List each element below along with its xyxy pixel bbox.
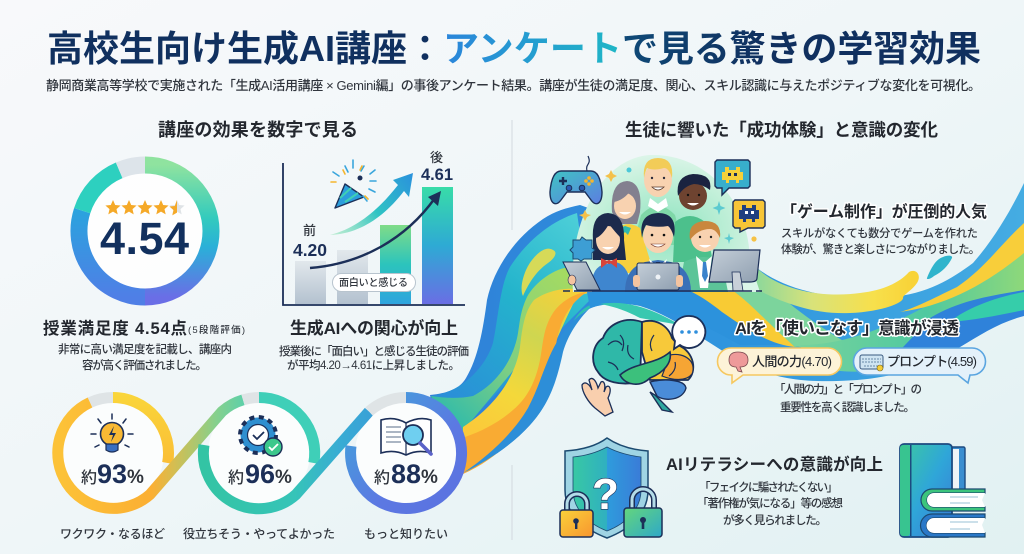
icon: books: [900, 444, 985, 537]
star rating: [105, 200, 185, 215]
ring 3 value: 88: [391, 459, 421, 489]
pill: human ability: [718, 348, 842, 383]
mint backdrop: [572, 155, 760, 292]
ring interiors: [62, 402, 457, 504]
panel: satisfaction donut: [79, 165, 211, 297]
satisfaction caption: 授業満足度 4.54点: [43, 318, 187, 338]
icon: yellow pixel bubble: [733, 200, 765, 232]
text: mastery body: 重要性を高く認識しました。: [780, 400, 915, 414]
tablet: [563, 262, 600, 290]
subtitle: 静岡商業高等学校で実施された「生成AI活用講座 × Gemini編」の事後アンケート結果。講座が生徒の満足度、関心、スキル認識に与えたポジティブな変化を可視化。: [46, 78, 981, 93]
icon: speech bubble on brain: [672, 316, 705, 349]
bar chart caption: 生成AIへの関心が向上: [290, 318, 458, 338]
ring 1 value: [81, 459, 144, 489]
up arrow: navy: [310, 191, 441, 268]
panel: bar chart: [283, 150, 465, 305]
axes: [283, 163, 465, 305]
yellow swoosh: [745, 268, 919, 313]
section heading: left: 講座の効果を数字で見る: [158, 120, 358, 140]
before label: 4.20: [293, 240, 327, 260]
satisfaction caption: 容が高く評価されました。: [82, 358, 207, 372]
pill: prompt: [854, 348, 986, 383]
divider: bottom: [511, 465, 513, 540]
text: mastery body: [774, 383, 922, 414]
back row boy: [633, 158, 683, 245]
shield: [565, 438, 648, 538]
satisfaction caption: [43, 318, 245, 372]
bar chart caption: [279, 318, 469, 372]
text: game creation: 体験が、驚きと楽しさにつながりました。: [781, 242, 980, 256]
text: AI literacy: が多く見られました。: [723, 513, 827, 527]
text: AI literacy: [666, 454, 883, 527]
title: [47, 28, 981, 69]
score: 4.54: [100, 213, 189, 264]
satisfaction caption: (5段階評価): [188, 324, 245, 336]
front centre boy: [625, 213, 691, 292]
ring strokes: [58, 397, 462, 509]
divider: top: [511, 120, 513, 230]
table line: [563, 290, 762, 292]
back row girl: [612, 181, 654, 273]
pill: human ability: 人間の力(4.70): [752, 354, 832, 369]
ring labels: [60, 526, 448, 541]
pill label: 面白いと感じる: [339, 276, 408, 289]
text: game creation: 「ゲーム制作」が圧倒的人気: [781, 202, 987, 221]
up arrow: teal: [330, 173, 413, 235]
pill: prompt: プロンプト(4.59): [887, 354, 977, 369]
ring 2 value: %: [275, 467, 292, 488]
after label: 後: [430, 150, 443, 165]
pill label: [332, 274, 416, 292]
title: アンケート: [443, 28, 622, 69]
ring 1 value: 約: [81, 469, 97, 487]
section heading: right: 生徒に響いた「成功体験」と意識の変化: [625, 120, 938, 140]
icon: hand: [582, 378, 613, 416]
after label: [421, 150, 453, 184]
before label: 前: [303, 223, 316, 238]
front left girl: [592, 213, 632, 292]
droplet: [927, 256, 952, 279]
icon: party popper: [331, 160, 376, 208]
standing book: [900, 444, 965, 537]
icon: light bulb: [91, 414, 133, 452]
satisfaction caption: 非常に高い満足度を記載し、講座内: [58, 342, 232, 356]
text: mastery body: 「人間の力」と「プロンプト」の: [774, 383, 922, 396]
donut ring: [79, 165, 211, 297]
text: game creation: [781, 202, 987, 256]
question mark: ?: [592, 470, 619, 519]
back row dark-skinned boy: [673, 174, 713, 262]
icon: open book with magnifier: [381, 419, 431, 455]
text: AI literacy: 「著作権が気になる」等の感想: [697, 496, 844, 510]
ring 2 value: [228, 459, 292, 489]
ring labels: 役立ちそう・やってよかった: [183, 526, 335, 541]
panel: three linked rings: [58, 397, 462, 541]
laptop: [633, 263, 683, 290]
icon: game controller: [550, 156, 602, 204]
before label: [293, 223, 327, 260]
yellow lock: [560, 494, 593, 537]
sparkles: [570, 168, 757, 261]
ring 2 value: 96: [245, 459, 275, 489]
bar chart caption: 授業後に「面白い」と感じる生徒の評価: [279, 344, 469, 358]
ring labels: もっと知りたい: [364, 526, 448, 541]
icon: mini brain: [729, 352, 748, 372]
bar chart caption: が平均4.20→4.61に上昇しました。: [287, 358, 460, 372]
after label: 4.61: [421, 166, 453, 184]
icon: shield with locks: [560, 438, 662, 538]
title: 高校生向け生成AI講座：: [47, 28, 443, 69]
text: mastery heading: AIを「使いこなす」意識が浸透: [735, 318, 959, 338]
text: AI literacy: AIリテラシーへの意識が向上: [666, 454, 883, 474]
bars: [295, 187, 453, 304]
icon: keyboard: [860, 355, 883, 371]
icon: gear with check: [240, 417, 282, 456]
text: game creation: スキルがなくても数分でゲームを作れた: [781, 226, 978, 240]
ring 1 value: 93: [97, 459, 127, 489]
illustration: students: [563, 155, 762, 292]
ring 3 value: [374, 459, 438, 489]
title: で見る驚きの学習効果: [622, 28, 981, 69]
green lock: [624, 489, 662, 537]
ring labels: ワクワク・なるほど: [60, 527, 165, 541]
ring 2 value: 約: [228, 469, 244, 487]
icon: brain: [593, 320, 693, 412]
ring 3 value: 約: [374, 469, 390, 487]
stacked books: [920, 489, 985, 537]
icon: teal pixel bubble: [715, 160, 750, 195]
ring 1 value: %: [127, 467, 144, 488]
ring 3 value: %: [421, 467, 438, 488]
front right boy: [678, 221, 728, 292]
flowing colour ribbon: [430, 183, 1024, 474]
text: AI literacy: 「フェイクに騙されたくない」: [699, 481, 838, 494]
monitor: [709, 250, 760, 291]
